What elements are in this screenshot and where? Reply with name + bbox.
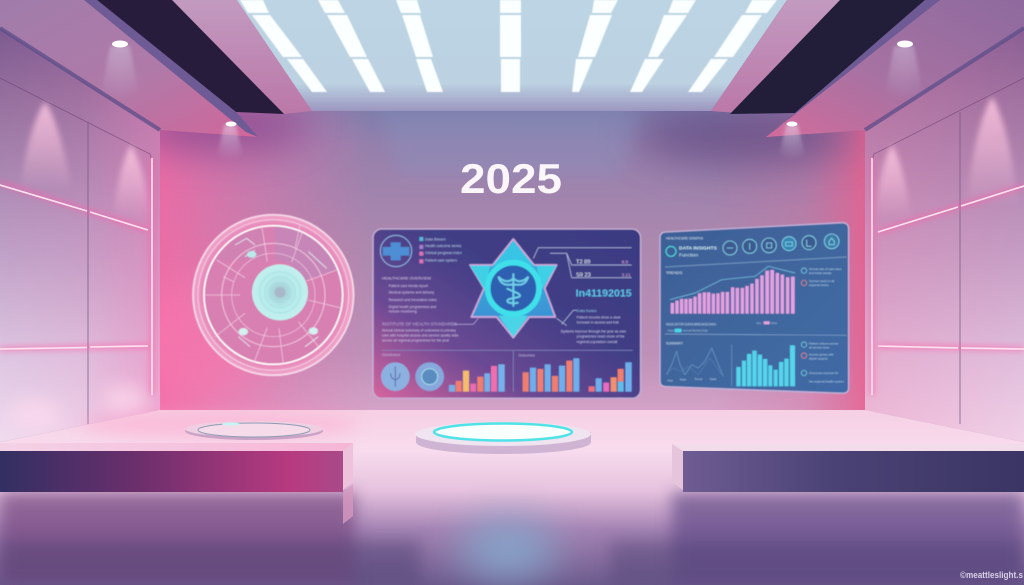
lower side notes: all service lines (809, 345, 830, 349)
right data readouts: 9.9 (622, 260, 629, 265)
spotlights (100, 40, 924, 160)
panel heading: Function (679, 252, 698, 258)
left text block: remote monitoring (389, 309, 417, 313)
left text block: Medical systems and delivery (389, 291, 434, 295)
line chart: Data (710, 377, 717, 381)
right text block: increase in access and trial (577, 321, 619, 325)
icon row (723, 234, 839, 255)
right dashboard panel (660, 223, 849, 393)
right data readouts: T2 89 (576, 260, 590, 266)
left text block: Patient care trends report (389, 284, 428, 288)
lower side notes: Patient volume across (809, 341, 839, 345)
right data readouts: In41192015 (576, 288, 632, 299)
bar chart 1 (449, 364, 505, 392)
lower side notes (801, 341, 844, 384)
line chart (667, 348, 723, 382)
round gauges (381, 362, 444, 391)
right text block: programmes reach more of the (577, 335, 625, 339)
chart legend: Data (668, 329, 674, 333)
title: 2025 (460, 155, 562, 202)
lower side notes: Outcomes improve for (809, 371, 838, 375)
pink bar chart (670, 266, 795, 314)
left text block (382, 275, 458, 343)
side notes: Annual rate of care rises (809, 267, 842, 271)
cyan bar chart (736, 345, 795, 386)
chart legend: Value (771, 321, 778, 325)
left text block: Digital health programmes and (389, 305, 436, 309)
legend list (419, 237, 462, 263)
legend list: Health outcome series (425, 244, 462, 248)
right data readouts (533, 248, 632, 299)
right text block: Systems improve through the year as care (561, 329, 626, 333)
right dashboard panel: SUMMARY (666, 342, 684, 346)
bar chart 3 (589, 362, 632, 392)
lower side notes: the regional health system (809, 380, 844, 384)
right text block: Patient records show a clear (577, 315, 621, 319)
center round platform (415, 422, 591, 454)
neon wall strips (0, 158, 1024, 395)
chart legend: INDICATOR DATA BREAKDOWN (666, 322, 716, 326)
right dashboard panel: TRENDS (666, 270, 683, 275)
chart legend: Key (757, 321, 762, 325)
hologram orb (193, 215, 354, 375)
center dashboard panel: Distribution (382, 353, 400, 357)
line chart: Rate (680, 378, 687, 382)
right text block: regional population overall (577, 340, 618, 344)
chart legend: Annual Monthly Daily (683, 329, 709, 333)
medical cross badge (380, 235, 412, 267)
legend list: Clinical progress index (425, 251, 462, 255)
side notes: regional clinics (809, 283, 829, 287)
left text block: HEALTHCARE OVERVIEW (382, 275, 431, 280)
center dashboard panel (373, 229, 641, 398)
panel heading (666, 236, 718, 258)
center dashboard panel: Outcomes (518, 354, 535, 358)
right text block: Data Notes (577, 308, 597, 313)
lower side notes: Access grows with (809, 352, 834, 356)
panel heading: DATA INSIGHTS (679, 246, 718, 252)
legend list: Patient care system (425, 259, 457, 263)
right text block (557, 308, 626, 344)
right side wall (865, 28, 1024, 442)
side notes: Service reach in all (809, 279, 835, 283)
ceiling soffits and dark slots (0, 0, 1024, 137)
back wall (115, 97, 875, 415)
left text block: INSTITUTE OF HEALTH STANDARDS (382, 322, 457, 327)
left text block: care with hospital access and service quality data (382, 334, 458, 338)
left side wall (0, 28, 160, 442)
panel heading: HEALTHCARE GRAPHS (666, 236, 704, 240)
legend list: Data Stream (425, 238, 446, 242)
lower side notes: digital support (809, 356, 828, 360)
left text block: Annual clinical summary of outcomes in primary (382, 329, 456, 333)
left text block: across all regional programmes for the year (382, 339, 450, 343)
caduceus star emblem (470, 239, 557, 338)
side notes (801, 267, 842, 287)
side notes: and holds steady (809, 271, 832, 275)
left text block: Research and innovation notes (389, 298, 437, 302)
light strips (240, 0, 777, 92)
chart legend (666, 321, 778, 333)
ceiling light panel (235, 0, 787, 111)
line chart: Year (667, 378, 673, 382)
line chart: Trend (694, 377, 702, 381)
right display block (672, 444, 1024, 492)
right data readouts: S9 23 (576, 272, 591, 278)
right data readouts: 3.21 (622, 272, 631, 277)
left round platform (185, 421, 323, 440)
bar chart 2 (523, 358, 579, 392)
floor (0, 410, 1024, 585)
left display block (0, 443, 353, 524)
